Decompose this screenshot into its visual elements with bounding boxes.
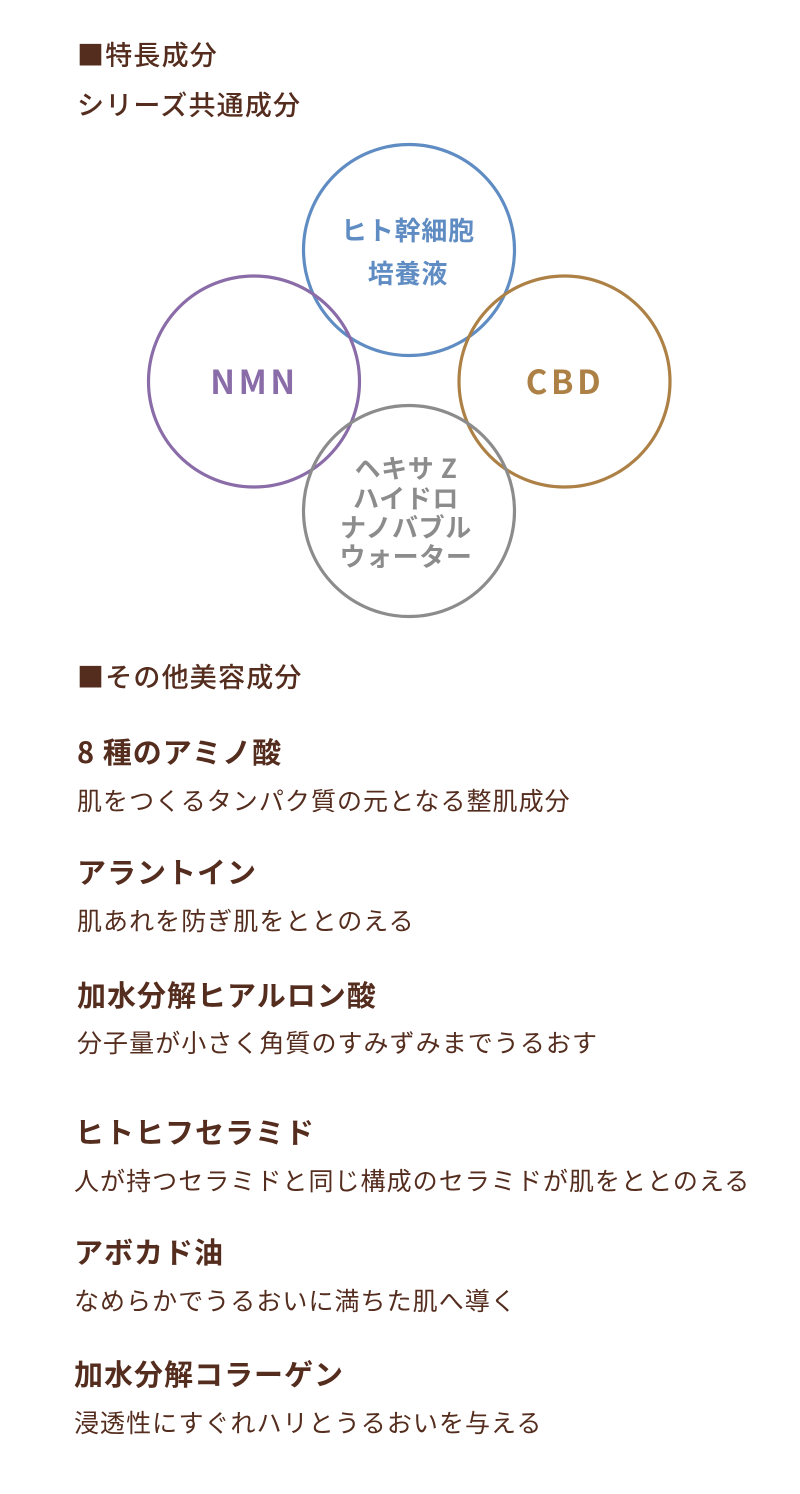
ingredient: 8 amino acids: 8 種のアミノ酸 (77, 730, 282, 772)
description: hydrolyzed hyaluronic acid: 分子量が小さく角質のすみずみまでうるおす (77, 1024, 598, 1060)
circle: human stem cell culture fluid: 培養液 (368, 254, 448, 291)
circle: hexa Z hydro nano bubble water (304, 406, 514, 616)
circle: CBD: CBD (526, 356, 604, 404)
circle: hexa Z hydro nano bubble water: ヘキサ Z (355, 449, 457, 486)
circle: NMN: NMN (210, 356, 299, 404)
circle: human stem cell culture fluid: ヒト幹細胞 (341, 211, 475, 248)
circle: CBD (459, 276, 670, 487)
circle: hexa Z hydro nano bubble water: ナノバブル (340, 508, 472, 545)
ingredient: hydrolyzed hyaluronic acid: 加水分解ヒアルロン酸 (77, 973, 377, 1015)
circle: hexa Z hydro nano bubble water: ウォーター (339, 537, 473, 574)
ingredient: human ceramide: ヒトヒフセラミド (75, 1110, 315, 1152)
description: hydrolyzed collagen: 浸透性にすぐれハリとうるおいを与える (74, 1404, 542, 1440)
ingredient: allantoin: アラントイン (77, 850, 257, 892)
ingredient: avocado oil: アボカド油 (74, 1230, 224, 1272)
heading: other beauty ingredients: ■その他美容成分 (77, 656, 303, 695)
circle: hexa Z hydro nano bubble water: ハイドロ (353, 479, 459, 516)
heading: featured ingredients: ■特長成分 (77, 34, 218, 73)
circle: NMN (148, 276, 360, 487)
circle: human stem cell culture fluid (304, 144, 514, 356)
description: allantoin: 肌あれを防ぎ肌をととのえる (77, 902, 415, 938)
subheading: series common ingredients: シリーズ共通成分 (77, 84, 301, 123)
description: 8 amino acids: 肌をつくるタンパク質の元となる整肌成分 (77, 782, 571, 818)
description: avocado oil: なめらかでうるおいに満ちた肌へ導く (74, 1282, 517, 1318)
description: human ceramide: 人が持つセラミドと同じ構成のセラミドが肌をととのえる (74, 1162, 750, 1198)
ingredient: hydrolyzed collagen: 加水分解コラーゲン (74, 1352, 344, 1394)
venn diagram (146, 142, 672, 618)
